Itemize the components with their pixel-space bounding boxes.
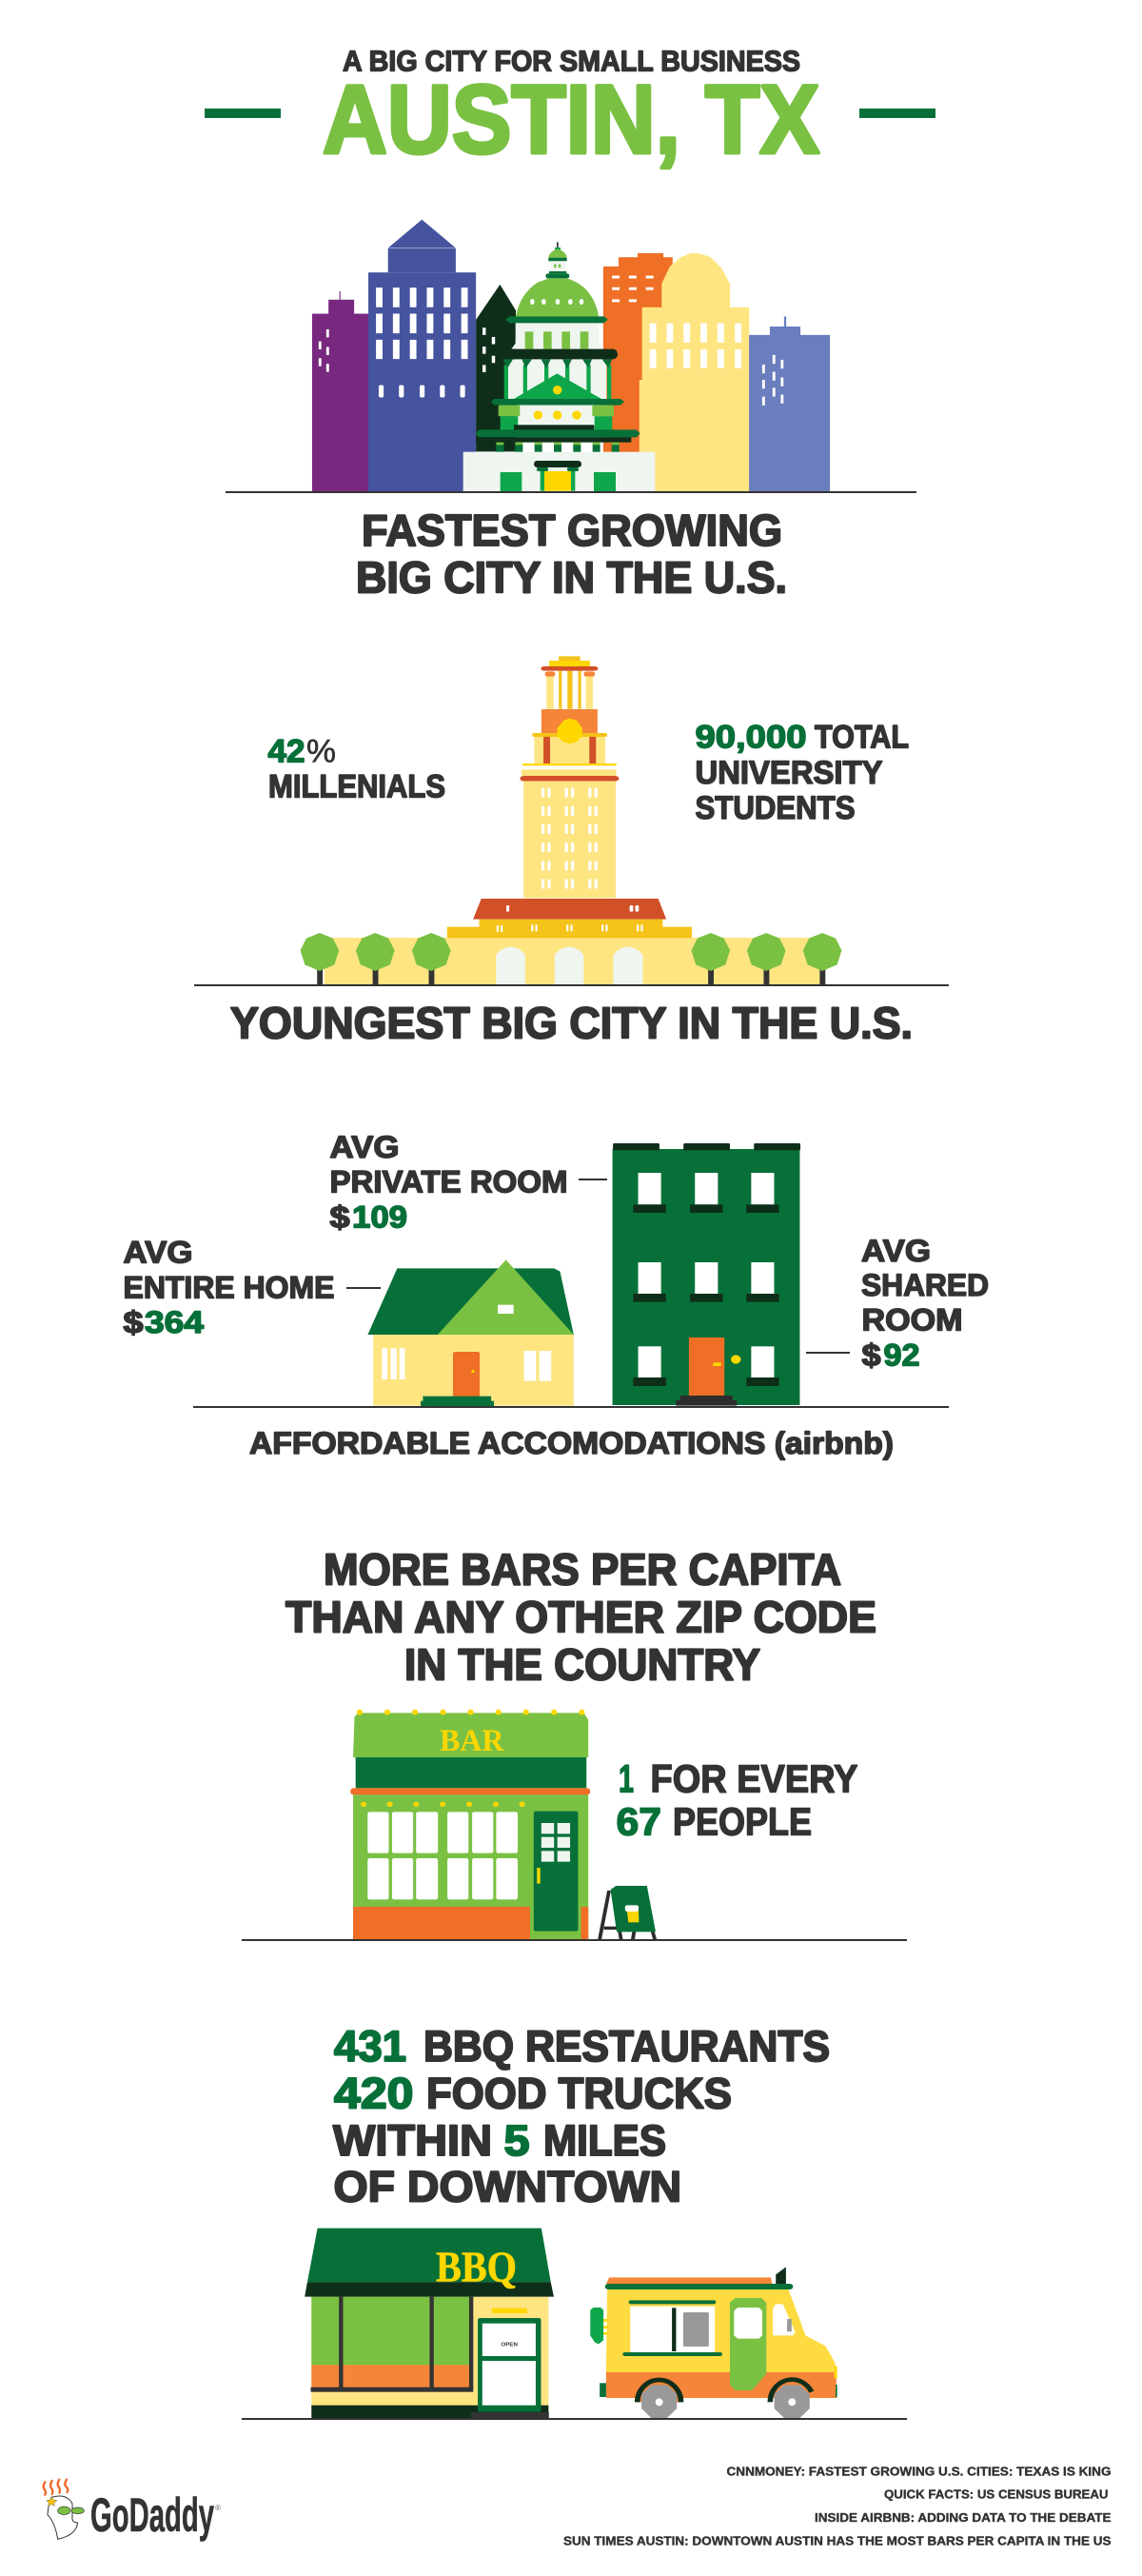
bar sign lettering: BAR	[440, 1724, 505, 1758]
label: avg shared room: AVG	[861, 1234, 931, 1268]
heading: fastest growing: BIG CITY IN THE U.S.	[356, 552, 787, 602]
stat: 1 for every 67 people: 67	[617, 1799, 661, 1843]
sources: QUICK FACTS: US CENSUS BUREAU	[884, 2487, 1108, 2502]
label: avg private room: PRIVATE ROOM	[329, 1164, 567, 1199]
stat: 42% millenials: %	[306, 733, 336, 769]
stat: 1 for every 67 people: PEOPLE	[673, 1799, 812, 1843]
heading: bbq and food truck stats: MILES	[543, 2116, 666, 2165]
illustration: apartment building	[613, 1143, 800, 1406]
label: avg private room: $	[329, 1199, 350, 1234]
heading: bbq and food truck stats: FOOD TRUCKS	[426, 2069, 732, 2117]
stat: 90,000 university students: TOTAL	[815, 720, 909, 756]
label: avg shared room: 92	[883, 1338, 919, 1372]
tower top	[520, 656, 619, 782]
heading: more bars per capita	[286, 1544, 876, 1689]
illustration: food truck	[590, 2267, 837, 2418]
illustration: BBQ restaurant	[305, 2229, 554, 2419]
label: avg entire home	[124, 1235, 381, 1339]
stat: 90,000 university students: 90,000	[695, 720, 807, 756]
building: capitol	[463, 242, 655, 492]
heading: bbq and food truck stats: OF DOWNTOWN	[333, 2163, 681, 2211]
tower shaft	[523, 782, 616, 898]
heading: bbq and food truck stats: 431	[334, 2022, 406, 2071]
label: avg entire home: 364	[145, 1305, 204, 1339]
sources: INSIDE AIRBNB: ADDING DATA TO THE DEBATE	[815, 2510, 1112, 2525]
building: blue tower	[368, 220, 476, 491]
heading: fastest growing	[356, 505, 787, 602]
illustration: bar storefront	[350, 1710, 590, 1940]
stat: 90,000 university students: UNIVERSITY	[695, 755, 883, 791]
stat: 1 for every 67 people: 1	[619, 1757, 634, 1801]
label: avg shared room: $	[862, 1338, 881, 1372]
icon: sandwich board with beer	[600, 1886, 656, 1940]
illustration: university tower	[301, 656, 841, 985]
subtitle: A BIG CITY FOR SMALL BUSINESS	[343, 44, 800, 78]
heading: bbq and food truck stats	[333, 2022, 830, 2211]
label: avg private room: AVG	[329, 1130, 400, 1164]
illustration: Austin skyline with capitol	[312, 220, 830, 492]
stat: 42% millenials	[268, 733, 445, 805]
stat: 90,000 university students	[695, 720, 909, 826]
label: avg shared room: SHARED	[861, 1268, 989, 1302]
building: dark spire	[476, 285, 516, 451]
heading: fastest growing: FASTEST GROWING	[362, 505, 782, 555]
sources	[563, 2464, 1112, 2547]
left accent bar	[205, 109, 281, 118]
stat: 42% millenials: MILLENIALS	[268, 769, 445, 805]
open sign: OPEN	[501, 2342, 518, 2348]
label: avg shared room	[806, 1234, 989, 1372]
heading: affordable accomodations: AFFORDABLE ACCOMODATIONS (airbnb)	[249, 1426, 894, 1460]
header: title block	[205, 44, 935, 173]
building: pale yellow domed tower	[640, 253, 752, 491]
heading: bbq and food truck stats: WITHIN	[333, 2116, 492, 2165]
heading: bbq and food truck stats: BBQ RESTAURANTS	[423, 2022, 830, 2071]
main building	[325, 899, 821, 985]
wordmark: GoDaddy	[90, 2488, 214, 2542]
building: steel blue	[749, 316, 830, 491]
heading: youngest big city: YOUNGEST BIG CITY IN THE U.S.	[230, 998, 913, 1047]
illustration: house	[367, 1259, 574, 1406]
heading: more bars per capita: IN THE COUNTRY	[404, 1639, 760, 1689]
registered mark: ®	[215, 2504, 221, 2512]
icon: GoDaddy mascot	[44, 2480, 84, 2539]
label: avg entire home: $	[124, 1305, 144, 1339]
label: avg entire home: ENTIRE HOME	[124, 1270, 335, 1304]
heading: more bars per capita: THAN ANY OTHER ZIP CODE	[286, 1592, 876, 1641]
main title: AUSTIN, TX	[323, 65, 819, 173]
sources: SUN TIMES AUSTIN: DOWNTOWN AUSTIN HAS THE MOST BARS PER CAPITA IN THE US	[563, 2534, 1112, 2547]
building: orange	[603, 253, 673, 455]
heading: bbq and food truck stats: 5	[504, 2116, 529, 2165]
sources: CNNMONEY: FASTEST GROWING U.S. CITIES: TEXAS IS KING	[727, 2464, 1112, 2479]
label: avg shared room: ROOM	[862, 1303, 963, 1338]
stat: 42% millenials: 42	[268, 733, 305, 769]
right accent bar	[859, 109, 935, 118]
stat: 1 for every 67 people: FOR EVERY	[651, 1757, 858, 1801]
trees	[301, 933, 841, 984]
BBQ sign lettering: BBQ	[436, 2243, 517, 2290]
label: avg entire home: AVG	[124, 1235, 192, 1269]
label: avg private room	[329, 1130, 607, 1234]
stat: 90,000 university students: STUDENTS	[695, 790, 855, 826]
stat: 1 for every 67 people	[617, 1757, 858, 1843]
heading: more bars per capita: MORE BARS PER CAPITA	[324, 1544, 841, 1594]
logo: GoDaddy	[44, 2480, 221, 2542]
building: purple	[312, 291, 369, 491]
heading: bbq and food truck stats: 420	[334, 2069, 413, 2117]
label: avg private room: 109	[352, 1199, 407, 1234]
